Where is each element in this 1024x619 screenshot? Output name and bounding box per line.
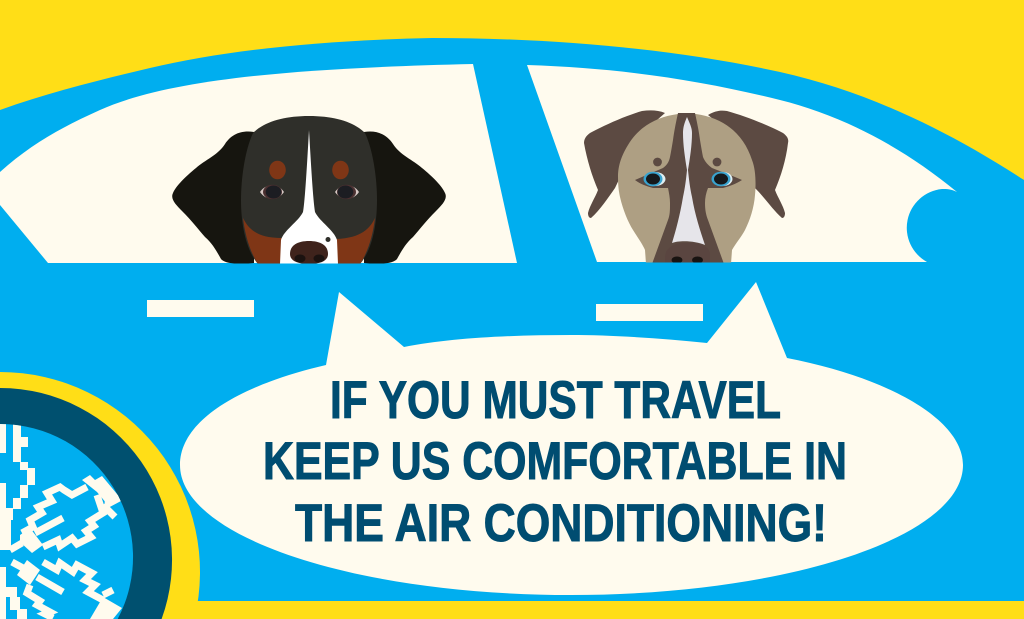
message text <box>263 371 847 553</box>
line 3: THE AIR CONDITIONING! <box>295 494 827 553</box>
door handle: rear <box>147 300 254 317</box>
rust cheek left <box>243 218 282 264</box>
icon: Bernese mountain dog <box>172 116 446 264</box>
head <box>241 116 377 264</box>
left ear <box>172 132 254 264</box>
bubble outline with cat ears <box>180 282 963 595</box>
head <box>618 114 756 264</box>
left ear <box>584 110 665 218</box>
center markings <box>635 113 742 264</box>
rust cheek right <box>336 218 375 264</box>
door handle: front <box>596 304 703 321</box>
right ear <box>708 111 788 218</box>
icon: brown and tan dog <box>584 110 788 264</box>
lower right branch <box>12 560 122 619</box>
nose <box>672 256 703 262</box>
wheel arch <box>0 372 200 619</box>
brow dots <box>653 158 721 166</box>
white blaze <box>280 130 338 264</box>
upper right branch <box>10 475 122 553</box>
speech bubble <box>180 282 963 595</box>
wheel hub <box>0 424 133 619</box>
panel: front window <box>527 65 957 262</box>
panel: rear window <box>0 64 517 263</box>
lower spoke <box>0 567 27 619</box>
right ear <box>364 132 446 264</box>
line 1: IF YOU MUST TRAVEL <box>330 371 781 430</box>
eyes <box>644 172 732 186</box>
white blaze <box>672 117 705 245</box>
nose <box>290 237 330 264</box>
brow spots <box>269 161 349 179</box>
line 2: KEEP US COMFORTABLE IN <box>263 432 847 491</box>
upper spoke <box>0 424 35 550</box>
eyes <box>260 185 359 199</box>
tyre <box>0 388 172 619</box>
icon: wheel snowflake pattern <box>0 424 122 619</box>
